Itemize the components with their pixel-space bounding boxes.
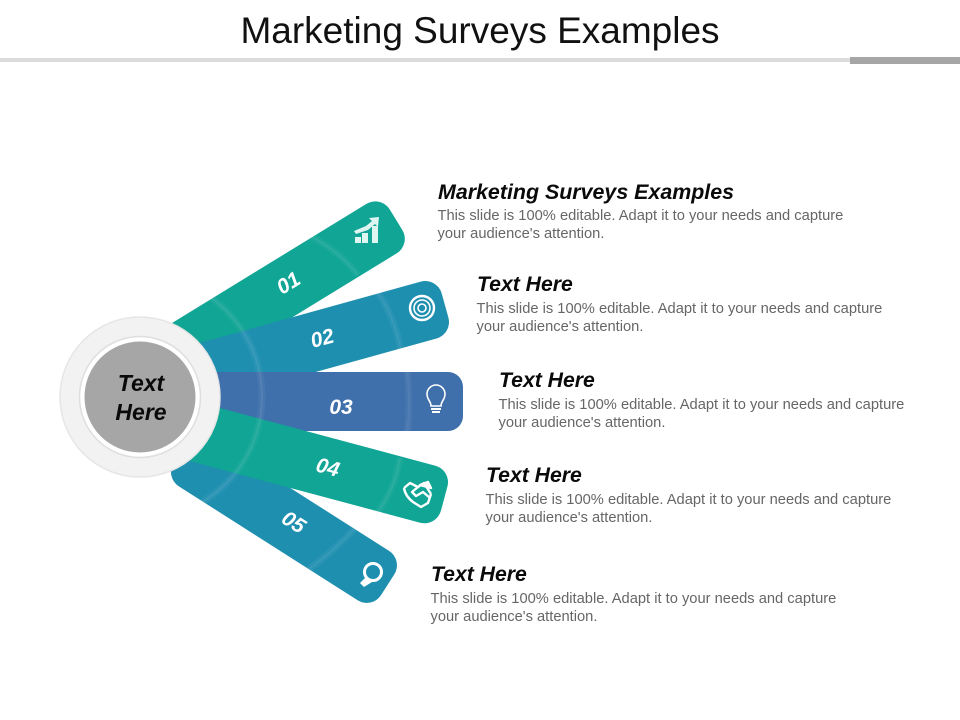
title rule [0,57,960,64]
text block 2: Text Here [477,273,573,296]
text block 4 [486,464,891,526]
number 05: 05 [277,507,310,539]
icon: light bulb [427,385,445,412]
text block 5 [430,563,836,625]
text block 1 [438,180,843,242]
blade 03 [216,372,463,431]
center label: Text [118,370,166,396]
number 03: 03 [329,396,353,419]
text block 3: your audience's attention. [498,415,665,431]
fan diagram [59,201,463,603]
number 04: 04 [313,454,342,482]
icon: handshake [404,482,431,507]
text block 1: This slide is 100% editable. Adapt it to your needs and capture [438,208,843,224]
number 01: 01 [273,268,305,299]
text block 1: your audience's attention. [438,226,604,242]
text block 5: your audience's attention. [430,609,597,625]
center circle [60,317,220,477]
center circle: Here [115,399,167,425]
icon: magnifier [360,564,382,587]
icon: growth chart [354,217,379,243]
icon: target [410,296,434,320]
text block 3: This slide is 100% editable. Adapt it to your needs and capture [498,397,904,413]
text block 4: your audience's attention. [486,510,652,526]
text block 2 [476,273,882,335]
text block 4: This slide is 100% editable. Adapt it to your needs and capture [486,492,891,508]
text block 3: Text Here [499,369,595,392]
text block 5: Text Here [431,563,527,586]
text block 2: This slide is 100% editable. Adapt it to your needs and capture [476,301,882,317]
blade 04 [190,408,448,524]
text block 5: This slide is 100% editable. Adapt it to your needs and capture [430,591,836,607]
blade 01 [172,201,405,343]
text block 1: Marketing Surveys Examples [438,180,734,204]
text block 3 [498,369,904,431]
title: Marketing Surveys Examples [240,10,720,51]
blade 02 [200,281,449,372]
blade 05 [171,460,397,603]
text block 2: your audience's attention. [476,319,643,335]
text block 4: Text Here [486,464,582,487]
number 02: 02 [308,325,337,353]
